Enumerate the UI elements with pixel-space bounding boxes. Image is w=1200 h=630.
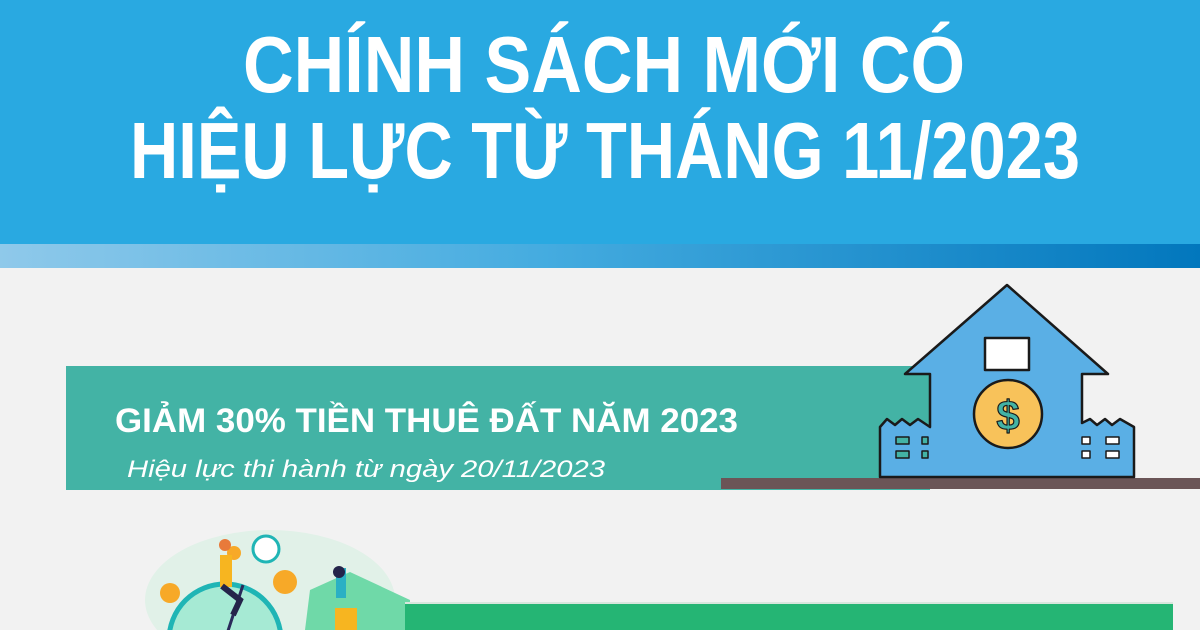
illustration: clock, people and money — [145, 530, 410, 630]
icon: house with coin: $ — [996, 392, 1020, 439]
header band — [0, 0, 1200, 268]
ground line — [721, 478, 1200, 489]
icon: house with coin — [880, 285, 1134, 477]
panel: next policy banner (cut off) — [405, 602, 1173, 630]
panel: land rent reduction banner — [66, 366, 930, 490]
heading: GIẢM 30% TIỀN THUÊ ĐẤT NĂM 2023 — [115, 402, 738, 440]
subtitle: Hiệu lực thi hành từ ngày 20/11/2023 — [127, 456, 606, 483]
title — [130, 20, 1080, 195]
title: CHÍNH SÁCH MỚI CÓ — [243, 20, 965, 109]
